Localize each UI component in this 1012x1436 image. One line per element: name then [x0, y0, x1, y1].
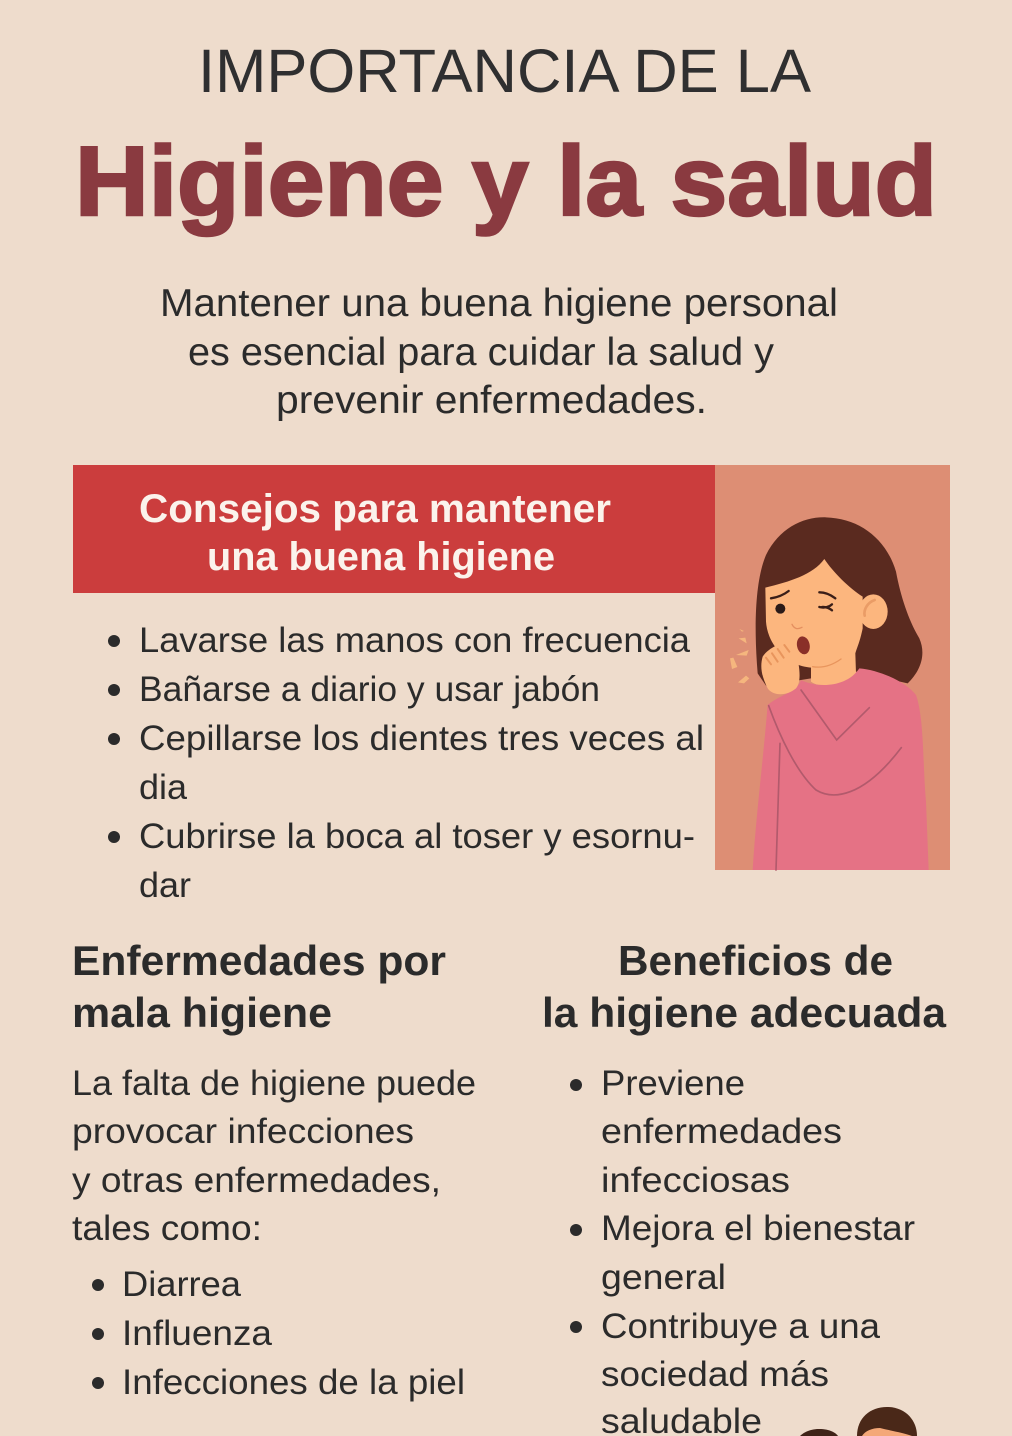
- list: beneficios: Mejora el bienestar: [601, 1209, 915, 1248]
- heading: enfermedades: mala higiene: [72, 989, 332, 1036]
- list: consejos: Cubrirse la boca al toser y esornu-: [139, 817, 695, 856]
- heading: beneficios: Beneficios de: [618, 937, 893, 984]
- list: beneficios: [570, 1064, 915, 1436]
- intro text: Mantener una buena higiene personal: [160, 282, 838, 325]
- illustration: people at bottom: [800, 1407, 917, 1436]
- list: enfermedades: Infecciones de la piel: [122, 1363, 465, 1402]
- panel: consejos banner: una buena higiene: [207, 535, 555, 579]
- intro text: prevenir enfermedades.: [276, 379, 707, 422]
- list: enfermedades: Influenza: [122, 1314, 273, 1353]
- text: enfermedades description: La falta de higiene puede: [72, 1064, 476, 1103]
- panel: consejos banner: [73, 465, 715, 593]
- intro text: [160, 282, 838, 422]
- illustration: girl coughing: [715, 465, 950, 870]
- list: consejos: Bañarse a diario y usar jabón: [139, 670, 600, 709]
- list: enfermedades: [92, 1265, 465, 1402]
- heading: beneficios: la higiene adecuada: [542, 989, 947, 1036]
- text: enfermedades description: y otras enfermedades,: [72, 1161, 441, 1200]
- list: beneficios: sociedad más: [601, 1355, 829, 1394]
- list: consejos: dia: [139, 768, 188, 807]
- title: importancia de la: IMPORTANCIA DE LA: [198, 37, 811, 105]
- list: enfermedades: Diarrea: [122, 1265, 242, 1304]
- list: consejos: Lavarse las manos con frecuencia: [139, 621, 691, 660]
- heading: enfermedades: [72, 937, 446, 1036]
- list: consejos: dar: [139, 866, 191, 905]
- title: higiene y la salud: Higiene y la salud: [75, 126, 937, 236]
- intro text: es esencial para cuidar la salud y: [188, 331, 775, 374]
- list: beneficios: enfermedades: [601, 1112, 842, 1151]
- list: beneficios: Previene: [601, 1064, 745, 1103]
- heading: enfermedades: Enfermedades por: [72, 937, 446, 984]
- list: consejos: Cepillarse los dientes tres veces al: [139, 719, 704, 758]
- text: enfermedades description: tales como:: [72, 1209, 262, 1248]
- text: enfermedades description: [72, 1064, 476, 1248]
- panel: consejos banner: Consejos para mantener: [139, 487, 611, 531]
- heading: beneficios: [542, 937, 947, 1036]
- list: beneficios: general: [601, 1258, 726, 1297]
- text: enfermedades description: provocar infecciones: [72, 1112, 414, 1151]
- list: consejos: [108, 621, 704, 905]
- list: beneficios: infecciosas: [601, 1161, 790, 1200]
- list: beneficios: Contribuye a una: [601, 1307, 881, 1346]
